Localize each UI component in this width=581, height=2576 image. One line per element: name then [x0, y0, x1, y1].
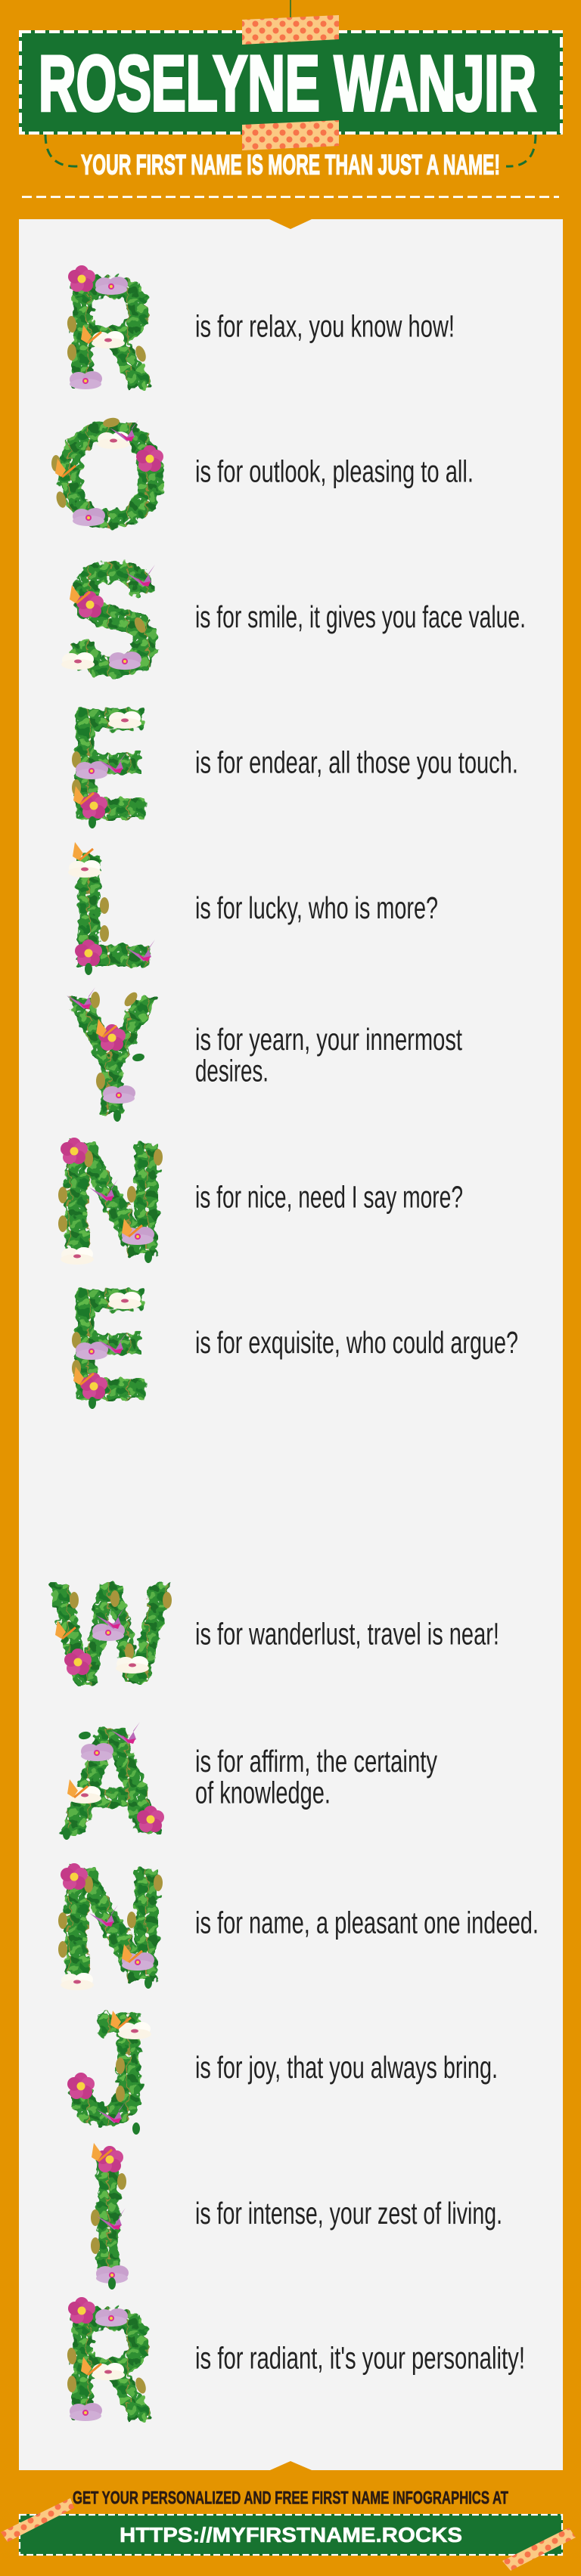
tape top	[242, 15, 339, 45]
text L: is for lucky, who is more?	[195, 890, 438, 925]
letter R last	[66, 2277, 153, 2451]
row: R	[66, 245, 455, 419]
row: L	[68, 824, 438, 998]
letter N second	[57, 1837, 166, 2012]
text A line 2: of knowledge.	[195, 1776, 331, 1810]
row: J	[67, 1981, 498, 2156]
row: W	[51, 1554, 499, 1713]
letter L: L	[70, 824, 152, 998]
row: S	[61, 531, 526, 708]
letter O: O	[53, 392, 168, 558]
letter A: A	[59, 1697, 163, 1864]
row: E second	[70, 1258, 518, 1432]
footer url: HTTPS://MYFIRSTNAME.ROCKS	[120, 2523, 462, 2547]
title banner	[19, 30, 563, 135]
row: N	[57, 1111, 463, 1286]
text A: is for affirm, the certainty	[195, 1744, 437, 1779]
text N: is for nice, need I say more?	[195, 1180, 463, 1215]
letter R: R	[66, 245, 153, 419]
footer url banner	[19, 2514, 563, 2556]
row: O	[51, 392, 474, 558]
tape footer right	[502, 2528, 576, 2571]
letter W: W	[51, 1554, 170, 1713]
hanging line	[290, 0, 291, 18]
letter S: S	[67, 531, 161, 708]
row: A	[59, 1697, 437, 1864]
letter Y: Y	[67, 964, 157, 1148]
curly connector right	[506, 135, 536, 166]
letter E second	[70, 1258, 149, 1432]
text Y: is for yearn, your innermost	[195, 1022, 462, 1057]
letter J: J	[70, 1981, 149, 2156]
letter I: I	[91, 2128, 126, 2308]
row: R last	[66, 2277, 525, 2451]
row: N second	[57, 1837, 539, 2012]
letter E: E	[70, 677, 149, 851]
text Y line 2: desires.	[195, 1054, 269, 1088]
tape footer left	[1, 2498, 74, 2542]
text O: is for outlook, pleasing to all.	[195, 454, 474, 488]
tape bottom	[242, 120, 339, 150]
row: I	[91, 2128, 502, 2308]
text R: is for relax, you know how!	[195, 309, 455, 344]
row: Y	[67, 964, 462, 1148]
letter N: N	[57, 1111, 166, 1286]
row: E	[70, 677, 518, 851]
curly connector left	[45, 135, 78, 166]
